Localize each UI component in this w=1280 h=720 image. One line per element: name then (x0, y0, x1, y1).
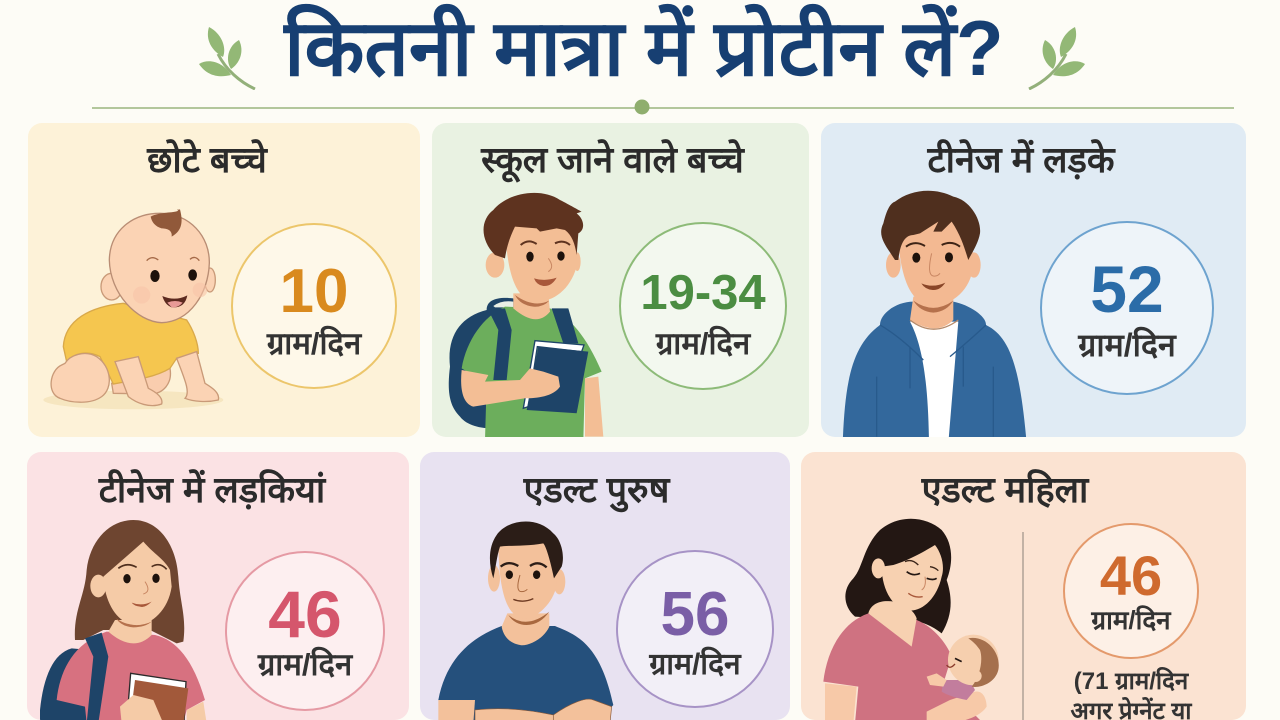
panel: teen boys (821, 123, 1246, 437)
value: 46 (268, 577, 342, 651)
unit: ग्राम/दिन (649, 648, 741, 681)
icon: left leaf sprig (199, 27, 256, 90)
unit: ग्राम/दिन (656, 326, 750, 361)
title: कितनी मात्रा में प्रोटीन लें? (284, 4, 1004, 92)
value: 10 (280, 257, 348, 326)
title divider (92, 100, 1234, 114)
protein ring: 56 g/day (616, 550, 774, 708)
unit: ग्राम/दिन (1091, 605, 1171, 635)
heading: school children: स्कूल जाने वाले बच्चे (481, 139, 744, 180)
icon: crawling baby (44, 209, 224, 410)
illustration: school boy with backpack (448, 192, 604, 437)
note: pregnant or breastfeeding: (71 ग्राम/दिन (1074, 668, 1188, 695)
unit: ग्राम/दिन (1078, 327, 1176, 363)
illustration: mother with baby (823, 518, 999, 720)
unit: ग्राम/दिन (258, 647, 352, 682)
value: 46 (1100, 544, 1162, 607)
illustration: teen girl with books (40, 520, 206, 720)
panel: adult men (420, 452, 790, 720)
panel: small children (28, 123, 420, 437)
heading: adult men: एडल्ट पुरुष (524, 469, 669, 510)
heading: teen boys: टीनेज में लड़के (927, 139, 1114, 180)
protein ring: 46 g/day (225, 551, 385, 711)
unit: ग्राम/दिन (267, 326, 361, 361)
protein ring: 46 g/day (1063, 523, 1199, 659)
protein ring: 19-34 g/day (619, 222, 787, 390)
panel: school children (432, 123, 809, 437)
panel: adult women (801, 452, 1246, 720)
heading: adult women: एडल्ट महिला (922, 469, 1088, 510)
value: 52 (1090, 252, 1164, 326)
protein ring: 52 g/day (1040, 221, 1214, 395)
heading: teen girls: टीनेज में लड़कियां (99, 469, 325, 510)
divider (1022, 532, 1024, 720)
illustration: teen boy in hoodie (842, 190, 1026, 437)
icon: right leaf sprig (1028, 27, 1085, 90)
note: pregnant or breastfeeding (1070, 667, 1192, 720)
heading: small children: छोटे बच्चे (147, 139, 267, 180)
panel: teen girls (27, 452, 409, 720)
illustration: man with arms crossed (438, 522, 614, 720)
value: 56 (661, 580, 729, 649)
value: 19-34 (640, 266, 766, 320)
protein ring: 10 g/day (231, 223, 397, 389)
